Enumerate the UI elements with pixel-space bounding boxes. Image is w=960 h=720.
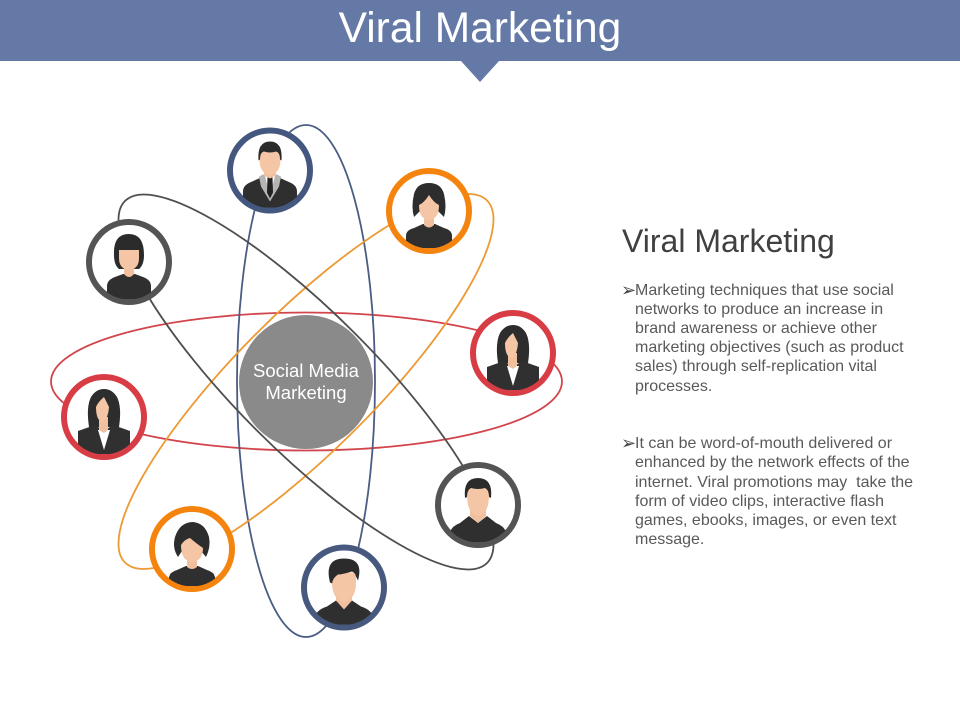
paragraph 1: processes. xyxy=(635,378,712,395)
paragraph 2: It can be word-of-mouth delivered or xyxy=(635,435,892,452)
paragraph 1: brand awareness or achieve other xyxy=(635,320,877,337)
avatar: woman with loose hair, orange ring xyxy=(389,171,469,251)
network diagram xyxy=(50,124,563,638)
avatar: woman in blazer, red ring left xyxy=(64,377,144,457)
paragraph 2: games, ebooks, images, or even text xyxy=(635,512,896,529)
header banner xyxy=(0,0,960,82)
avatar: man, dark ring right xyxy=(438,465,518,545)
avatar: man in suit, blue ring xyxy=(230,130,310,210)
paragraph 1: sales) through self-replication vital xyxy=(635,358,877,375)
side heading: Viral Marketing xyxy=(622,223,835,259)
paragraph 1: ➢ xyxy=(621,280,636,301)
title: Viral Marketing xyxy=(339,5,621,52)
avatar: woman in blazer, red ring right xyxy=(473,313,553,393)
avatar: woman with short messy hair, orange ring left xyxy=(152,509,232,589)
paragraph 1: networks to produce an increase in xyxy=(635,301,883,318)
orbit: red xyxy=(51,312,562,450)
central circle xyxy=(239,315,373,449)
paragraph 2: ➢ xyxy=(621,433,636,454)
paragraph 2: form of video clips, interactive flash xyxy=(635,493,884,510)
central label: Social Media xyxy=(253,360,359,381)
paragraph 2: message. xyxy=(635,531,704,548)
avatar: young man, blue ring bottom xyxy=(304,548,384,628)
orbit: orange xyxy=(76,152,536,611)
orbit: blue xyxy=(237,125,375,637)
paragraph 1: marketing objectives (such as product xyxy=(635,339,904,356)
avatar: woman with bob and fringe, dark ring left xyxy=(89,222,169,302)
paragraph 2: enhanced by the network effects of the xyxy=(635,454,910,471)
orbit: dark grey xyxy=(76,152,536,612)
central label: Marketing xyxy=(265,382,347,403)
paragraph 2: internet. Viral promotions may take the xyxy=(635,474,913,491)
paragraph 1: Marketing techniques that use social xyxy=(635,282,894,299)
